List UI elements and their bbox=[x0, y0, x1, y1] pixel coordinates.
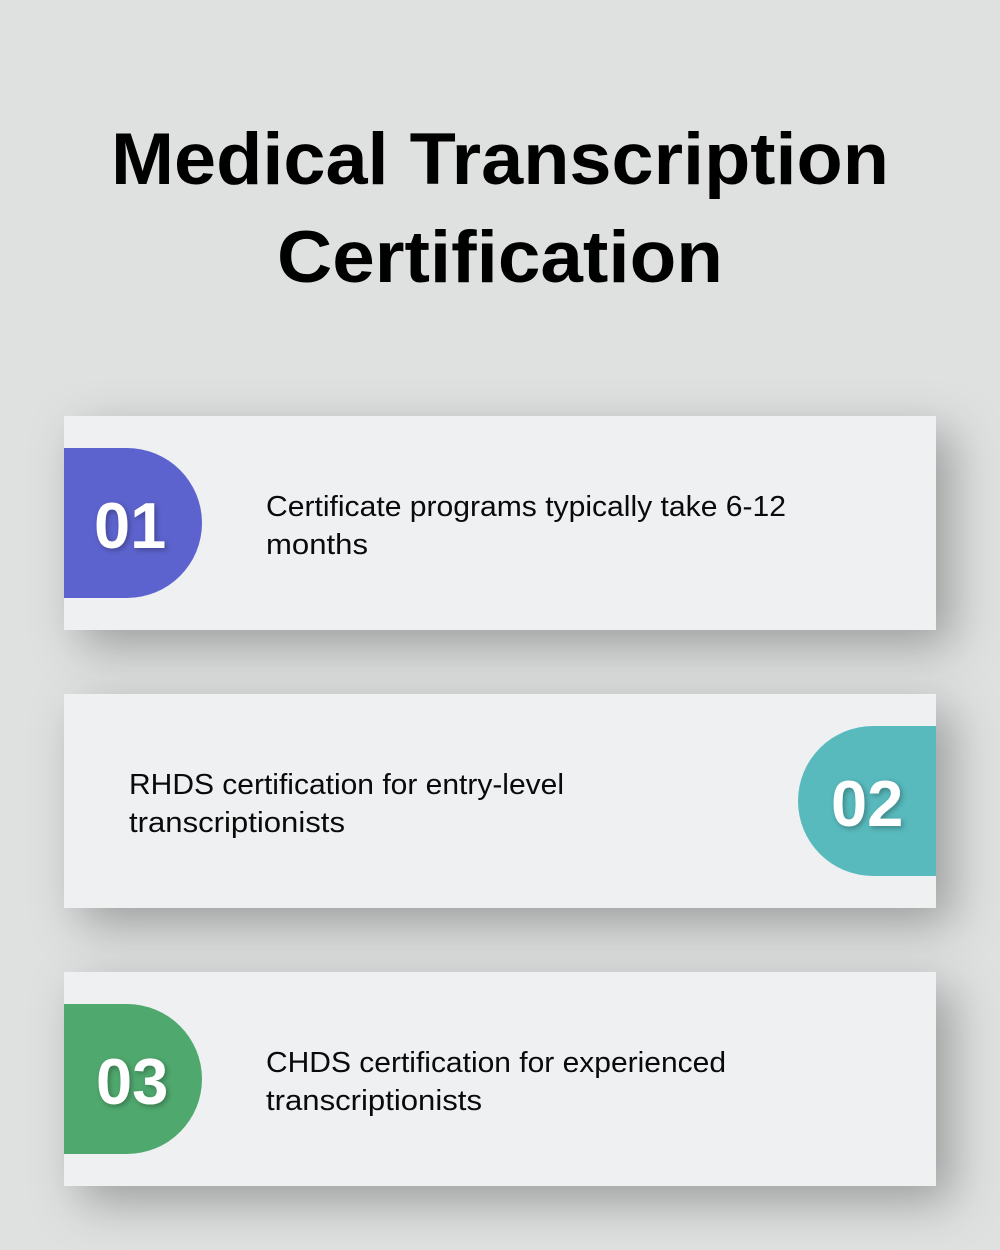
text 01 bbox=[266, 491, 786, 561]
number 03: 03 bbox=[96, 1045, 168, 1118]
text 01: months bbox=[266, 529, 368, 561]
card background 03 bbox=[64, 972, 936, 1186]
text 02 bbox=[129, 769, 564, 839]
panel: step 03 bbox=[64, 972, 936, 1186]
panel: step 02 bbox=[64, 694, 936, 908]
number badge 01 bbox=[64, 448, 202, 598]
number 02: 02 bbox=[831, 767, 903, 840]
text 01: Certificate programs typically take 6-12 bbox=[266, 491, 786, 523]
text 02: transcriptionists bbox=[129, 807, 345, 839]
text 03: transcriptionists bbox=[266, 1085, 482, 1117]
card background 01 bbox=[64, 416, 936, 630]
title: Medical Transcription bbox=[111, 119, 889, 200]
number 01: 01 bbox=[94, 489, 166, 562]
title bbox=[111, 119, 889, 298]
number badge 02 bbox=[798, 726, 936, 876]
panel: step 01 bbox=[64, 416, 936, 630]
number badge 03 bbox=[64, 1004, 202, 1154]
card background 02 bbox=[64, 694, 936, 908]
title: Certification bbox=[277, 217, 723, 298]
text 03: CHDS certification for experienced bbox=[266, 1047, 726, 1079]
text 02: RHDS certification for entry-level bbox=[129, 769, 564, 801]
text 03 bbox=[266, 1047, 726, 1117]
